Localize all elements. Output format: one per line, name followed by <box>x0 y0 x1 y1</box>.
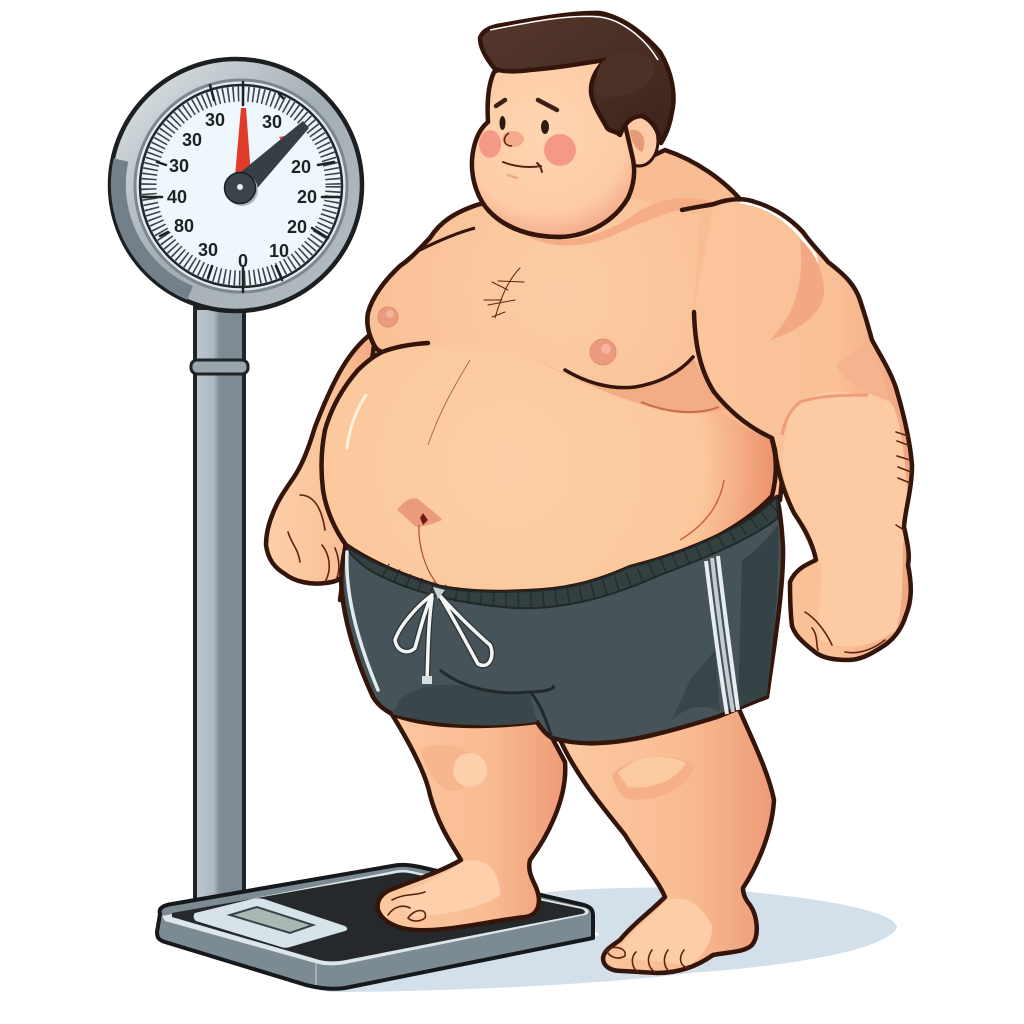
dial numbers: 30 <box>169 156 189 176</box>
drawstring <box>395 587 492 684</box>
chin mark <box>508 175 517 178</box>
shade fold <box>672 650 720 720</box>
ear <box>620 116 658 166</box>
hair rim highlight <box>490 16 658 60</box>
dial numbers: 20 <box>291 157 311 177</box>
far foot top <box>622 899 712 965</box>
left nipple <box>378 307 398 327</box>
far knee highlight <box>612 756 695 800</box>
mouth <box>503 162 542 172</box>
dial numbers: 30 <box>198 240 218 260</box>
left eyebrow <box>496 100 505 106</box>
arm outline <box>682 199 912 660</box>
under-pec shade <box>560 357 728 414</box>
right arm and shoulder <box>682 199 912 660</box>
forearm fold <box>782 395 868 435</box>
arm fill <box>694 199 912 660</box>
dial numbers <box>167 110 317 271</box>
elbow shade <box>836 340 890 402</box>
near foot top <box>396 860 500 917</box>
dark side panel <box>738 525 779 708</box>
dial <box>110 59 362 311</box>
hair shine <box>596 52 655 97</box>
chest <box>367 195 755 430</box>
display housing <box>194 898 347 948</box>
swim shorts <box>341 497 783 743</box>
belly outline <box>322 352 776 593</box>
nose <box>502 131 524 147</box>
rubber mat <box>172 872 585 961</box>
right cheek <box>544 134 576 166</box>
dial numbers: 20 <box>297 187 317 207</box>
side stripes <box>706 556 738 714</box>
right eye <box>541 120 549 134</box>
chest fold <box>420 228 475 250</box>
hair <box>480 13 674 143</box>
belly crease <box>428 360 470 445</box>
weighing scale <box>110 59 593 989</box>
shoulder highlight <box>740 202 820 282</box>
red needle <box>235 108 251 176</box>
side piping <box>347 552 378 690</box>
dial numbers: 20 <box>287 217 307 237</box>
pec lower line <box>565 357 693 388</box>
dial numbers: 30 <box>182 130 202 150</box>
belly <box>322 344 776 593</box>
dial numbers: 30 <box>262 112 282 132</box>
navel <box>397 498 442 585</box>
right eyebrow <box>538 100 557 110</box>
red marker <box>279 135 290 147</box>
dial numbers: 0 <box>238 251 248 271</box>
dial numbers: 10 <box>269 241 289 261</box>
left chest outline <box>367 204 480 352</box>
lower fold <box>641 402 719 412</box>
near knee highlight <box>420 745 480 791</box>
right fist lines <box>805 612 885 653</box>
scale platform <box>157 865 593 989</box>
left cheek <box>479 130 501 158</box>
far leg <box>558 700 774 973</box>
dial ticks <box>149 94 333 278</box>
far toes <box>606 948 688 972</box>
forearm hairs <box>896 432 911 530</box>
person <box>266 13 912 973</box>
forearm shape <box>782 392 907 647</box>
floor shadow <box>300 888 897 992</box>
waistband <box>348 497 778 608</box>
near leg <box>378 708 565 930</box>
waistband ribs <box>385 505 775 600</box>
left eye <box>500 116 506 130</box>
belly highlight <box>347 395 366 448</box>
left arm <box>266 333 380 584</box>
near toes <box>388 892 425 921</box>
head <box>472 13 674 237</box>
chest hair <box>484 268 524 318</box>
face <box>472 60 634 237</box>
dial numbers: 40 <box>167 187 187 207</box>
black needle <box>236 121 309 192</box>
left fist lines <box>288 495 339 582</box>
dial numbers: 80 <box>174 216 194 236</box>
chin line <box>488 198 628 237</box>
display screen <box>230 907 313 933</box>
shoulder shade <box>770 240 824 340</box>
major ticks <box>143 82 340 292</box>
neck shadow <box>520 198 716 246</box>
leg divide <box>440 670 553 738</box>
lower shorts shade <box>392 685 537 725</box>
right nipple <box>590 339 616 365</box>
scale pole <box>191 308 248 908</box>
side crease <box>680 480 724 540</box>
pivot <box>224 172 258 206</box>
torso back and neck <box>340 150 800 600</box>
dial numbers: 30 <box>205 110 225 130</box>
